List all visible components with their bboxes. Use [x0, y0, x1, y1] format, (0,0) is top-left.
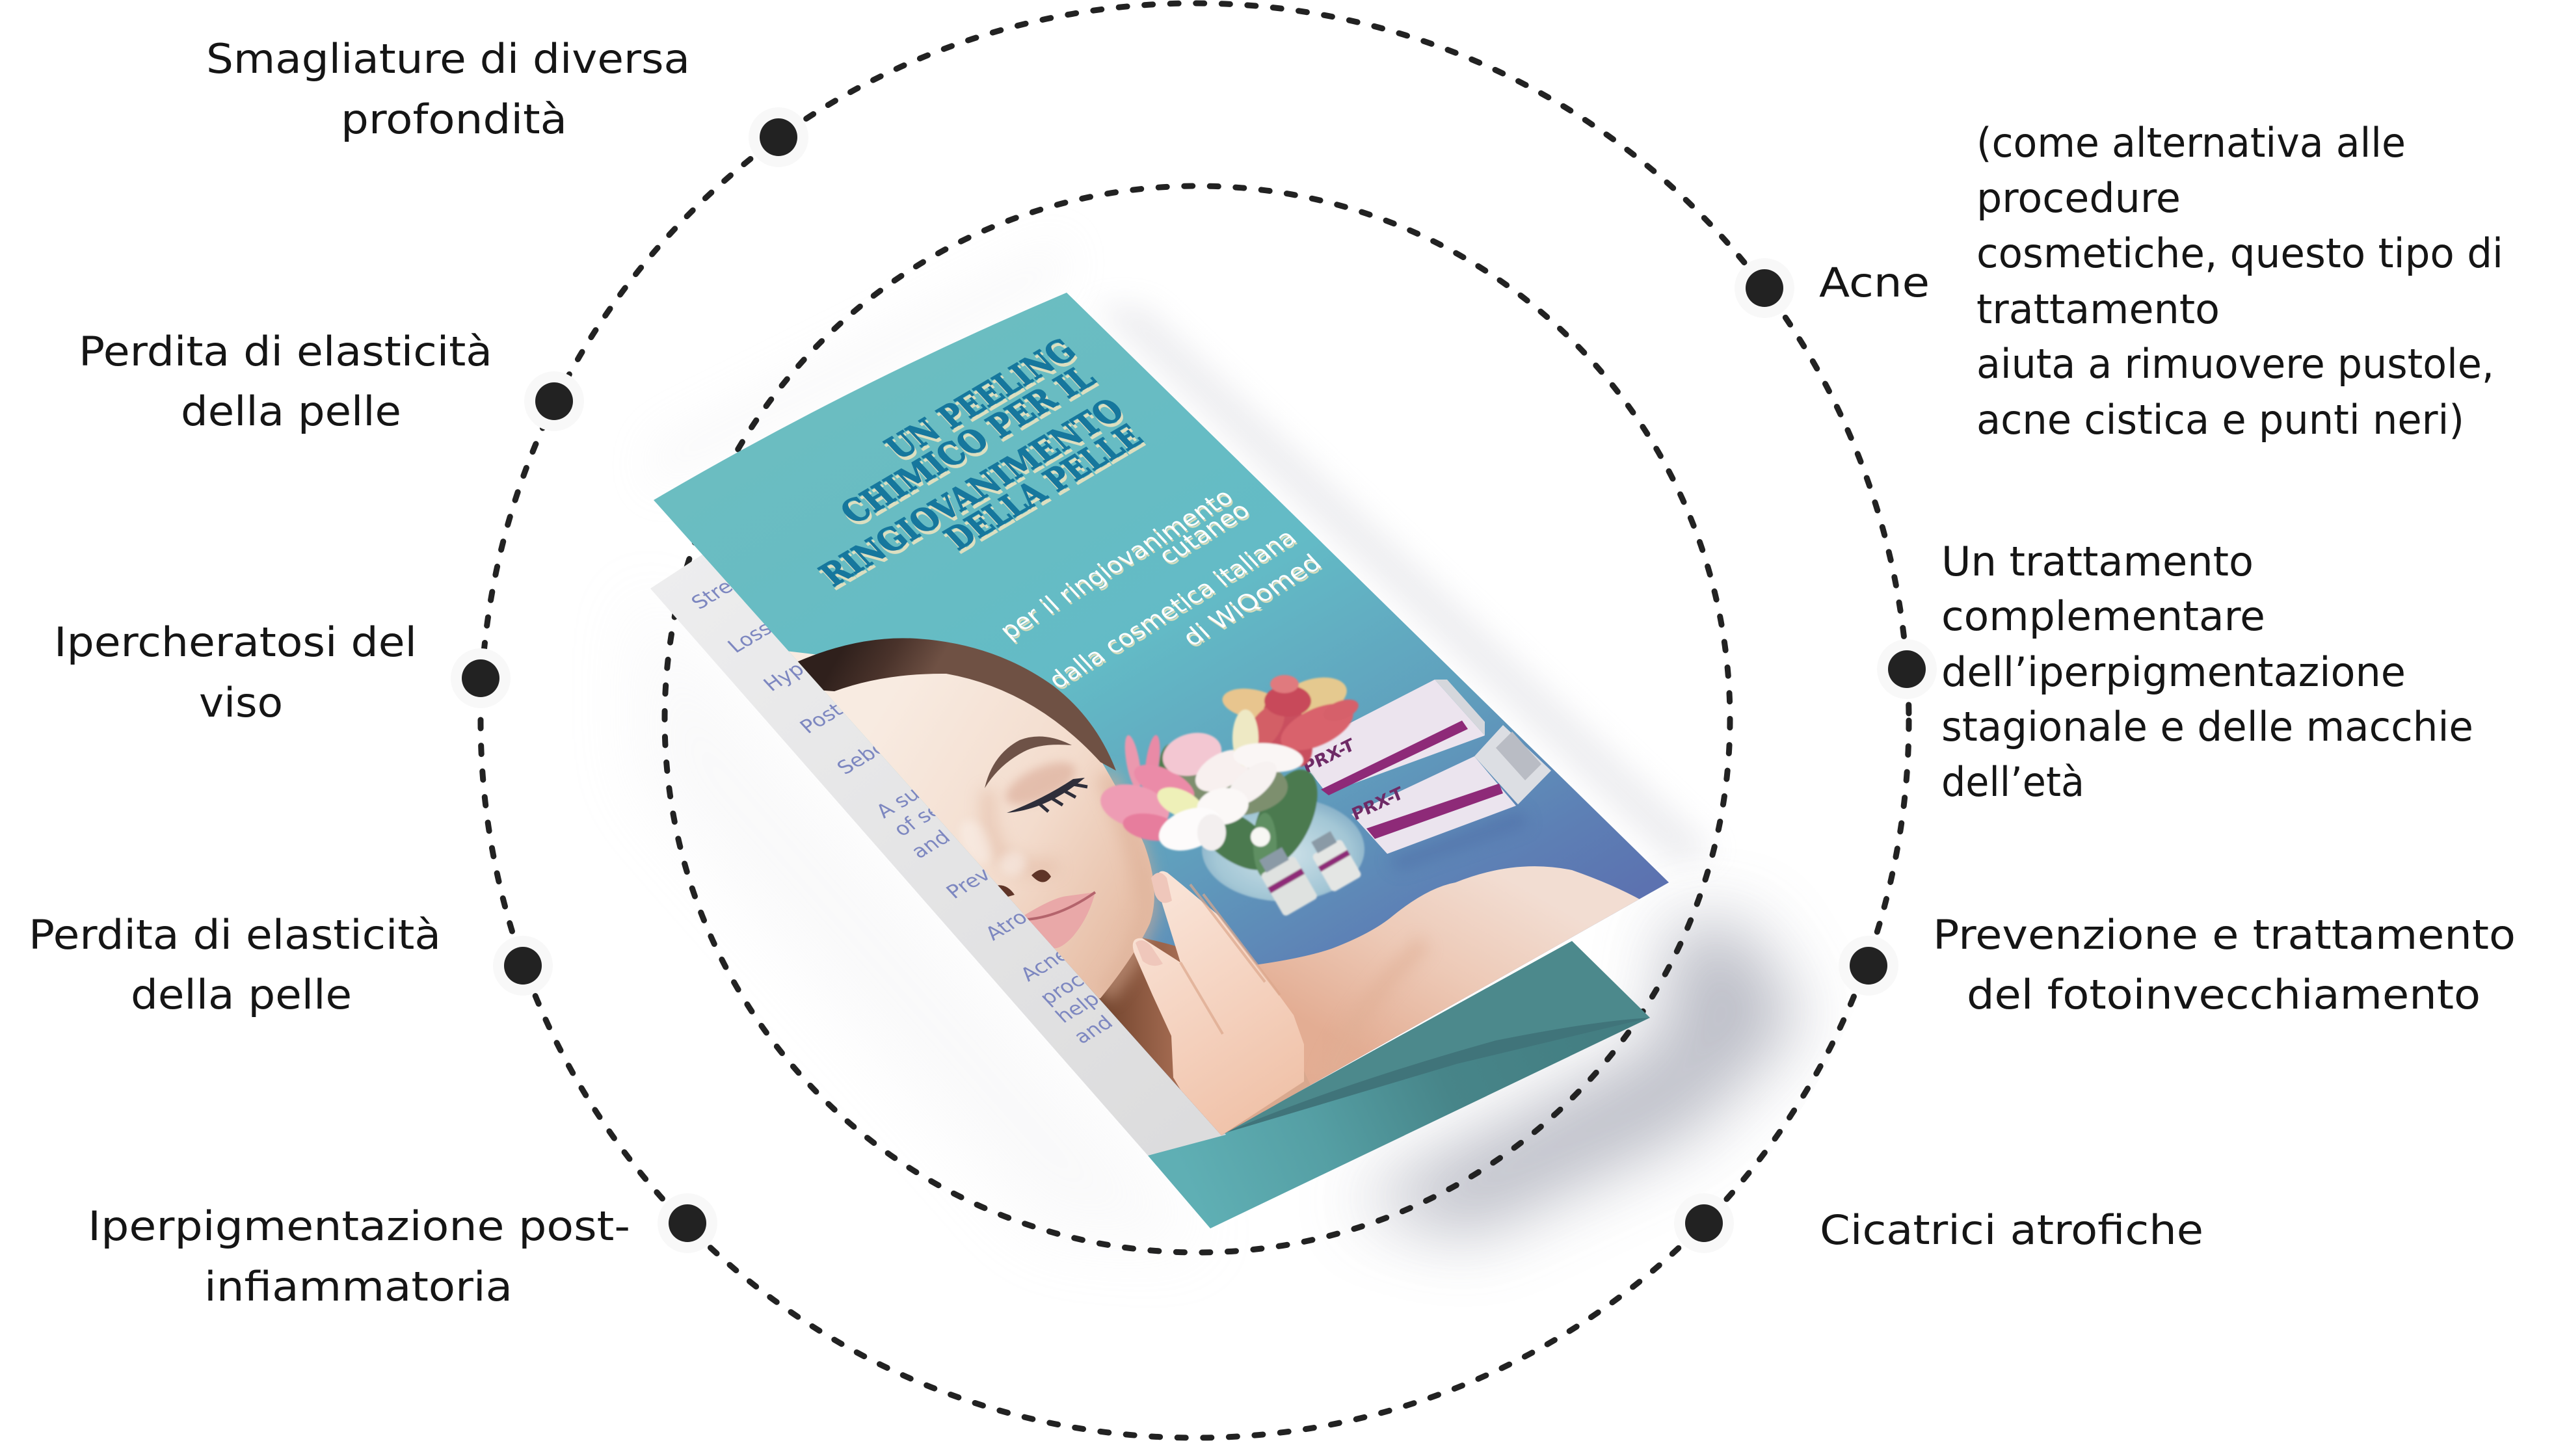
inner grey page with list text: Stre [687, 576, 738, 614]
label: cicatrici atrofiche: Cicatrici atrofiche [1820, 1206, 2203, 1254]
label: perdita di elasticità (lower): Perdita di elasticità [29, 911, 441, 959]
cover subtitle: dalla cosmetica italiana [1043, 524, 1302, 694]
cover subtitle [994, 483, 1327, 694]
label: perdita di elasticità (upper): Perdita di elasticità [79, 328, 492, 375]
label: prevenzione fotoinvecchiamento: del fotoinvecchiamento [1967, 971, 2481, 1018]
label: trattamento complementare: dell’iperpigmentazione [1941, 648, 2406, 696]
label: acne description: trattamento [1976, 285, 2220, 333]
flower bouquet and vase [1096, 670, 1364, 917]
cover subtitle: di WiQomed [1177, 549, 1327, 652]
label: acne description: (come alternativa alle [1976, 119, 2406, 166]
cheek and temple shading [1102, 774, 1148, 995]
label: ipercheratosi [54, 618, 417, 726]
label: smagliature: profondità [341, 96, 567, 143]
outer dashed ring [481, 3, 1909, 1438]
marker dot: right [1877, 639, 1937, 699]
pink alstroemeria [1096, 726, 1227, 845]
cover subtitle: per il ringiovanimento [994, 483, 1239, 644]
inner grey page with list text: Acne [1016, 943, 1074, 986]
label: perdita di elasticità (lower): della pelle [131, 971, 352, 1018]
cover title: CHIMICO PER IL [832, 358, 1103, 531]
label: acne description: acne cistica e punti neri) [1976, 396, 2464, 443]
inner grey page with list text: Atro [981, 907, 1032, 945]
inner grey page with list text: Prev [942, 864, 996, 903]
woman's face [780, 650, 1154, 1001]
brochure [650, 293, 1669, 1228]
upper box [1294, 680, 1485, 793]
inner dashed ring [665, 186, 1730, 1252]
inner grey page with list text [650, 533, 1226, 1156]
PRX-T product boxes: PRX-T [1300, 735, 1358, 778]
lips [1024, 892, 1095, 948]
woman's hand [1133, 871, 1304, 1135]
marker dot: bottom right [1674, 1193, 1734, 1253]
PRX-T product boxes [1294, 680, 1551, 871]
eyebrow [985, 737, 1072, 788]
white alstroemeria [1152, 709, 1305, 858]
shoulder and neck [1073, 866, 1642, 1138]
inner grey page with list text: and [1069, 1012, 1118, 1048]
label: acne description: aiuta a rimuovere pustole, [1976, 340, 2494, 388]
eye shadow [1004, 760, 1077, 808]
marker dot: lower right [1839, 936, 1898, 996]
nose [995, 869, 1051, 897]
label: smagliature [206, 35, 690, 143]
red alstroemeria [1220, 670, 1361, 774]
label: acne: Acne [1819, 259, 1930, 306]
marker dot: left [451, 648, 511, 708]
cover title: DELLA PELLE [937, 418, 1151, 557]
leaves [1159, 744, 1331, 882]
label: ipercheratosi: Ipercheratosi del [54, 618, 417, 666]
label: iperpigmentazione post-infiammatoria: Iperpigmentazione post- [88, 1202, 630, 1250]
inner grey page with list text: Loss [723, 618, 777, 657]
cover subtitle: cutaneo [1152, 497, 1255, 570]
marker dot: upper left [524, 371, 584, 431]
label: ipercheratosi: viso [199, 679, 283, 726]
label: trattamento complementare: stagionale e delle macchie [1941, 703, 2473, 750]
woman's hair [767, 638, 1116, 771]
label: acne description: procedure [1976, 174, 2181, 222]
inner grey page with list text: A su [871, 783, 925, 823]
PRX-T product boxes: PRX-T [1349, 783, 1406, 825]
inner grey page with list text: proc [1035, 970, 1089, 1009]
brochure front flap [1148, 1018, 1650, 1228]
label: perdita di elasticità (upper) [79, 328, 492, 435]
marker dot: top left [749, 107, 808, 167]
marker dot: acne [1735, 258, 1794, 318]
label: prevenzione fotoinvecchiamento: Prevenzione e trattamento [1933, 911, 2516, 959]
inner grey page with list text: Post [795, 699, 847, 738]
brochure drop shadow [637, 234, 1802, 1249]
vial 1 [1254, 844, 1318, 917]
cover title: RINGIOVANIMENTO [812, 391, 1132, 594]
label: prevenzione fotoinvecchiamento [1933, 911, 2516, 1018]
label: smagliature: Smagliature di diversa [206, 35, 690, 83]
label: iperpigmentazione post-infiammatoria [88, 1202, 630, 1310]
lower box [1351, 756, 1516, 854]
cover title: UN PEELING [877, 332, 1084, 467]
brochure cover [654, 293, 1669, 1135]
vial 2 [1305, 828, 1363, 893]
label: iperpigmentazione post-infiammatoria: infiammatoria [204, 1263, 512, 1310]
label: perdita di elasticità (upper): della pelle [181, 388, 401, 435]
inner grey page with list text: Hyp [759, 658, 809, 696]
box end panel [1474, 725, 1551, 804]
label: acne description [1976, 119, 2503, 443]
label: trattamento complementare: Un trattamento [1941, 538, 2254, 585]
inner grey page with list text: of se [889, 799, 947, 841]
label: trattamento complementare [1941, 538, 2473, 806]
label: trattamento complementare: complementare [1941, 592, 2265, 640]
box shadow [1387, 810, 1528, 871]
inner grey page with list text: Sebo [832, 736, 892, 779]
inner grey page with list text: and [907, 827, 955, 863]
label: perdita di elasticità (lower) [29, 911, 441, 1018]
label: acne description: cosmetiche, questo tipo di [1976, 230, 2503, 277]
inner grey page with list text: help [1051, 988, 1104, 1027]
label: trattamento complementare: dell’età [1941, 758, 2084, 806]
brochure back flap [1223, 941, 1650, 1133]
lashes [1007, 778, 1085, 813]
glass vase [1202, 797, 1364, 901]
marker dot: bottom left [658, 1193, 717, 1253]
marker dot: lower left [493, 936, 553, 996]
